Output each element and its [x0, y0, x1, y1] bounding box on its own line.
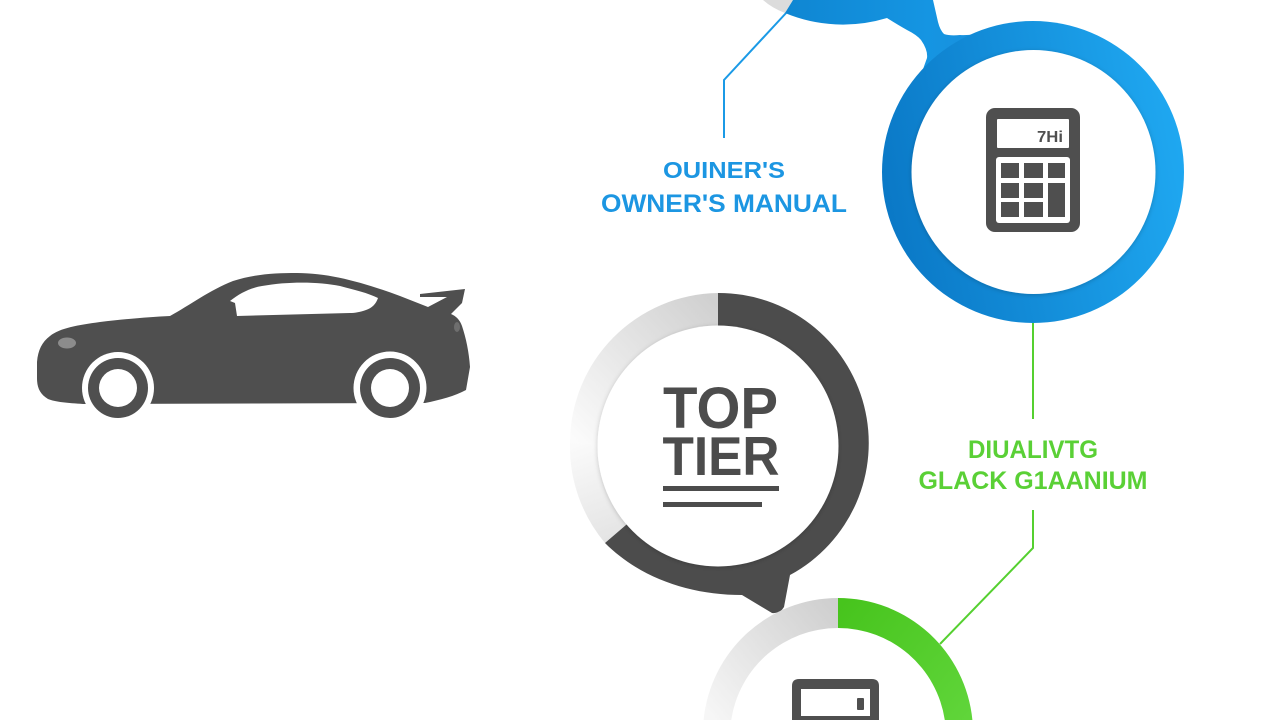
icon: calculator bottom: [792, 679, 879, 720]
green label: DIUALIVTG: [968, 436, 1098, 464]
top tier badge text: TOP: [663, 376, 778, 441]
connector: blue line to label: [724, 12, 787, 138]
blue circle partly cropped at top, joined to the ring by a neck: [763, 0, 990, 72]
icon: calculator top: 7Hi: [1037, 129, 1063, 146]
icon: calculator top: [986, 108, 1080, 232]
connector: green line to top: [1032, 323, 1034, 419]
green ring partly cropped at bottom: [704, 598, 972, 720]
blue label: [601, 157, 847, 218]
connector: green line to bottom ring: [940, 510, 1033, 644]
top tier ring: [570, 293, 869, 613]
icon: car silhouette: [37, 273, 470, 424]
green label: [918, 436, 1148, 495]
top tier badge text: TIER: [662, 425, 780, 487]
top tier badge text: [662, 376, 780, 507]
blue label: OWNER'S MANUAL: [601, 190, 847, 218]
blue calculator ring: [882, 21, 1184, 323]
green label: GLACK G1AANIUM: [918, 467, 1148, 495]
blue label: OUINER'S: [663, 157, 785, 183]
